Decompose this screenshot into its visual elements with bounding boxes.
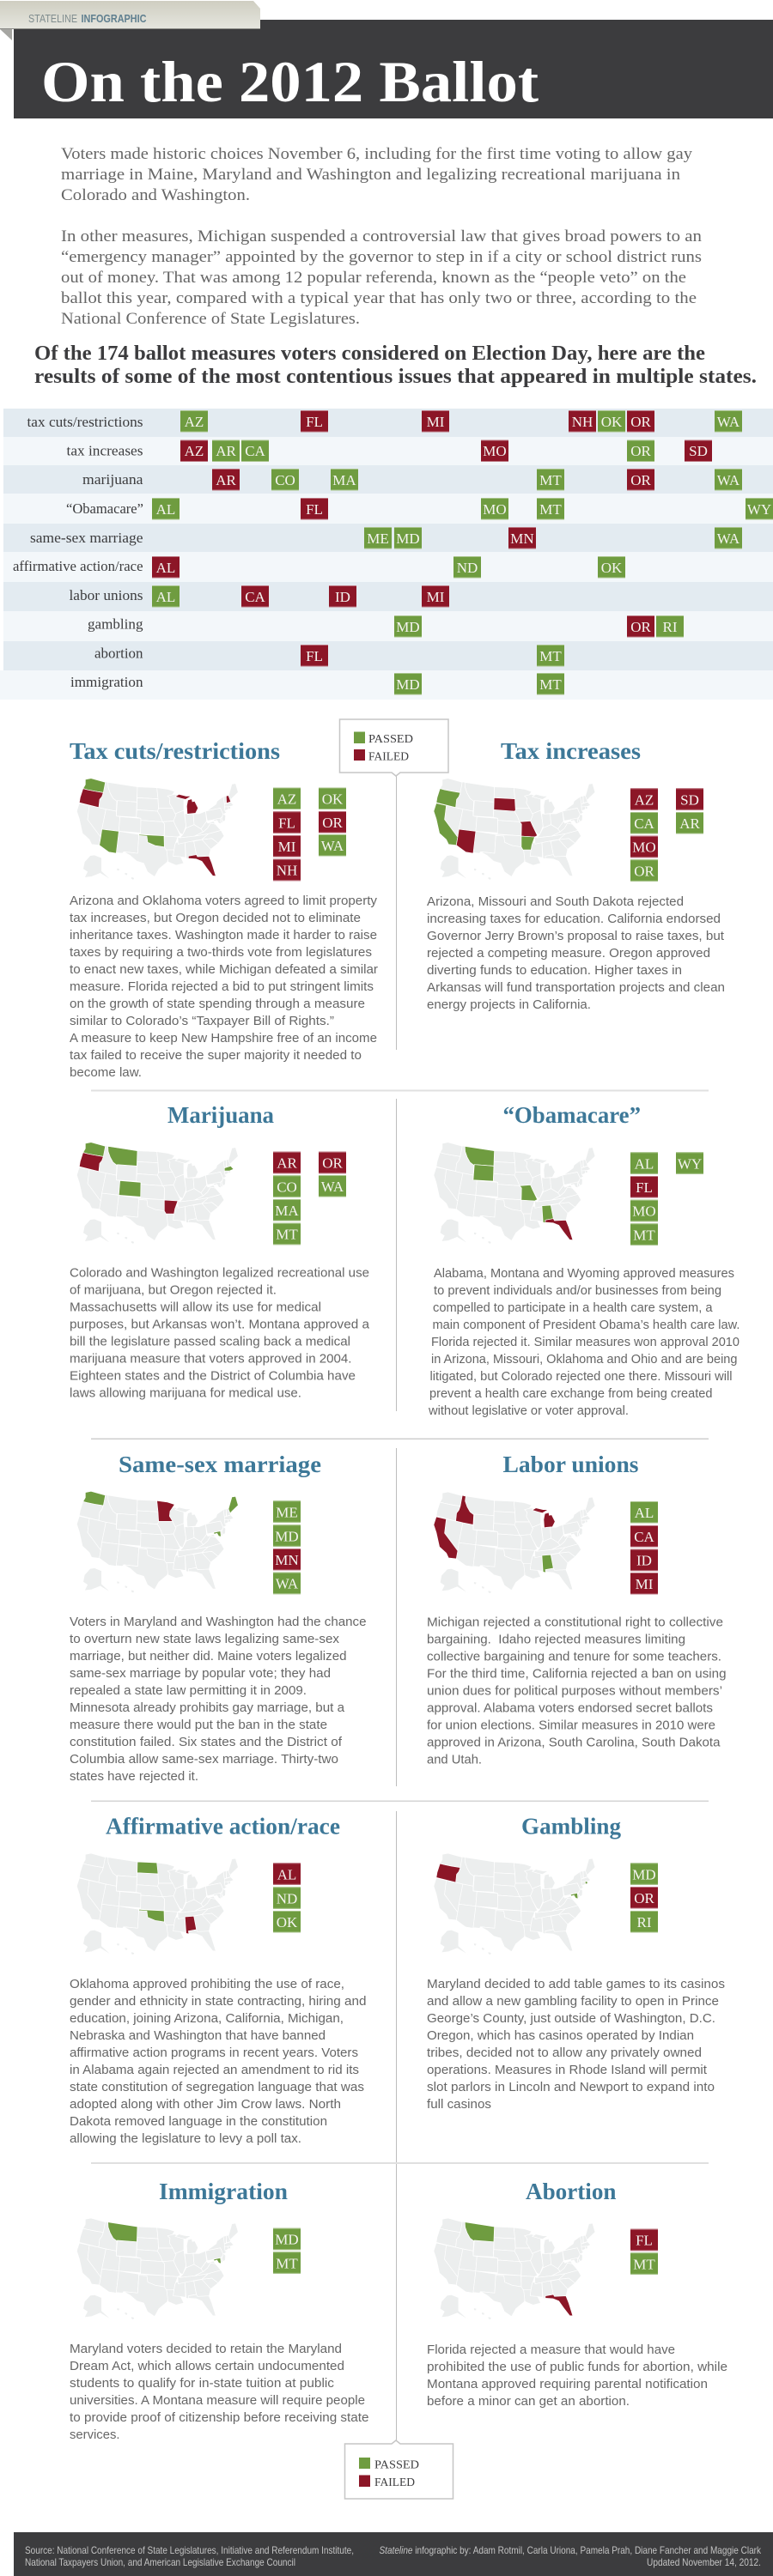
row: same-sex marriage: MN — [510, 530, 534, 547]
body text: same-sex marriage by popular vote; they had — [70, 1666, 331, 1681]
body text: universities. A Montana measure will require people — [70, 2393, 365, 2408]
body text: purposes, but Arkansas won’t. Montana approved a — [70, 1317, 370, 1331]
state chips: MN — [275, 1552, 299, 1568]
panel: same-sex marriage — [70, 1452, 366, 1784]
lead statement: results of some of the most contentious issues that appeared in multiple states. — [34, 366, 757, 388]
state chips — [273, 788, 346, 881]
state chips — [273, 1863, 301, 1933]
body text: A measure to keep New Hampshire free of an income — [70, 1031, 377, 1046]
state chips: WY — [678, 1155, 702, 1172]
body text: tax increases, but Oregon decided not to eliminate — [70, 911, 361, 925]
body text: to overturn new state laws legalizing same-sex — [70, 1632, 339, 1646]
body text: in Arizona, Missouri, Oklahoma and Ohio and are being — [431, 1352, 737, 1367]
body text: tax failed to receive the super majority it needed to — [70, 1048, 362, 1063]
body text: Oklahoma approved prohibiting the use of race, — [70, 1977, 344, 1991]
body text: laws allowing marijuana for medical use. — [70, 1385, 301, 1400]
intro text: “emergency manager” appointed by the governor to step in if a city or school district runs — [61, 248, 702, 266]
heading: “Obamacare” — [503, 1102, 641, 1128]
state chips: AL — [277, 1866, 296, 1882]
row: Obamacare: MT — [539, 501, 562, 518]
row: tax cuts/restrictions — [3, 409, 773, 437]
row: labor unions: CA — [245, 589, 266, 605]
body text: and Utah. — [427, 1753, 482, 1767]
state chips: AZ — [635, 791, 654, 808]
state chips: AL — [635, 1505, 654, 1521]
row: tax cuts/restrictions: OR — [630, 414, 651, 430]
body text: For the third time, California rejected a ban on using — [427, 1667, 727, 1682]
title banner — [14, 20, 773, 118]
body text — [70, 2342, 369, 2442]
body text: Maryland decided to add table games to its casinos — [427, 1977, 725, 1991]
body text: George’s County, just outside of Washington, D.C. — [427, 2011, 715, 2026]
state chips: MO — [632, 839, 656, 856]
state chips: ME — [276, 1504, 298, 1520]
body text: allowing the legislature to levy a poll tax. — [70, 2131, 301, 2146]
state chips: FL — [636, 2233, 653, 2249]
panel: affirmative action/race — [70, 1813, 366, 2146]
panel: gambling — [427, 1813, 725, 2112]
header tab — [0, 1, 260, 40]
body text: students to qualify for in-state tuition at public — [70, 2376, 335, 2391]
body text: taxes by requiring a two-thirds vote from legislatures — [70, 945, 372, 960]
header tab: INFOGRAPHIC — [81, 12, 147, 25]
body text: gender and ethnicity in state contracting, hiring and — [70, 1994, 366, 2009]
state chips: MT — [276, 2255, 298, 2271]
row: gambling: RI — [663, 619, 678, 635]
row: tax increases: AZ — [185, 443, 204, 459]
top legend — [340, 719, 448, 776]
panel: Obamacare — [428, 1102, 740, 1418]
body text: slot parlors in Lincoln and Newport to expand into — [427, 2080, 715, 2094]
row: Obamacare: AL — [156, 501, 175, 518]
body text: compelled to participate in a health care system, a — [433, 1300, 713, 1315]
body text: Colorado and Washington legalized recreational use — [70, 1265, 369, 1280]
body text: union dues for political purposes without members’ — [427, 1684, 722, 1699]
body text: operations. Measures in Rhode Island will permit — [427, 2063, 708, 2077]
row: tax cuts/restrictions: tax cuts/restrictions — [27, 414, 143, 430]
row: marijuana — [3, 465, 773, 494]
panel: immigration — [70, 2179, 369, 2442]
state chips: NH — [277, 863, 297, 879]
row: tax increases: OR — [630, 443, 651, 459]
body text — [70, 1977, 366, 2146]
body text: without legislative or voter approval. — [428, 1403, 629, 1418]
row: tax cuts/restrictions: MI — [427, 414, 445, 430]
state chips: RI — [637, 1914, 652, 1930]
row: tax cuts/restrictions: AZ — [185, 414, 204, 430]
row: tax cuts/restrictions: WA — [717, 414, 740, 430]
state chips — [630, 788, 703, 882]
state chips: CA — [634, 1529, 655, 1545]
heading: Immigration — [159, 2179, 288, 2204]
body text: bill the legislature passed scaling back a medical — [70, 1334, 350, 1349]
state chips: MA — [275, 1203, 299, 1219]
body text: energy projects in California. — [427, 997, 591, 1012]
row: abortion — [3, 641, 773, 670]
row: marijuana: marijuana — [82, 471, 143, 488]
row: abortion: abortion — [94, 646, 143, 661]
row: tax increases: SD — [689, 443, 708, 459]
intro text: ballot this year, compared with a typical year that has only two or three, according to the — [61, 289, 697, 307]
body text: collective bargaining and tenure for some teachers. — [427, 1650, 721, 1664]
heading: Gambling — [521, 1813, 621, 1839]
state chips — [630, 1152, 703, 1246]
row: tax cuts/restrictions: OK — [601, 414, 623, 430]
body text: state constitution of segregation language that was — [70, 2080, 364, 2094]
map — [76, 1491, 238, 1593]
intro text: out of money. That was among 12 popular referenda, known as the “people veto” on the — [61, 269, 686, 287]
body text: affirmative action programs in recent years. Voters — [70, 2046, 358, 2060]
body text: Governor Jerry Brown’s proposal to raise taxes, but — [427, 929, 725, 943]
row: abortion: MT — [539, 648, 562, 664]
row: marijuana: MA — [332, 472, 356, 488]
body text: on the growth of state spending through a measure — [70, 997, 365, 1011]
body text: Arizona, Missouri and South Dakota rejected — [427, 894, 684, 909]
lead statement — [34, 342, 757, 388]
body text — [70, 1265, 370, 1400]
body text: marijuana measure that voters approved in 2004. — [70, 1351, 351, 1366]
body text: main component of President Obama’s health care law. — [433, 1318, 740, 1332]
row: affirmative action/race — [3, 552, 773, 582]
body text: Montana approved requiring parental notification — [427, 2377, 708, 2391]
row: same-sex marriage — [3, 524, 773, 552]
map — [434, 2218, 595, 2320]
row: abortion: FL — [306, 648, 323, 664]
row: Obamacare: “Obamacare” — [66, 500, 143, 517]
state chips: SD — [680, 791, 699, 808]
body text: rejected a competing measure. Oregon approved — [427, 946, 710, 961]
map — [76, 1143, 238, 1244]
row: tax cuts/restrictions: NH — [572, 414, 593, 430]
row: Obamacare — [3, 494, 773, 524]
heading: Marijuana — [167, 1102, 274, 1128]
row: labor unions: AL — [156, 589, 175, 605]
heading: Abortion — [526, 2179, 617, 2204]
body text: marriage, but neither did. Maine voters legalized — [70, 1649, 347, 1664]
body text: prohibited the use of public funds for abortion, while — [427, 2360, 727, 2374]
bottom legend — [345, 2440, 453, 2499]
body text: litigated, but Colorado rejected one there. Missouri will — [429, 1369, 732, 1384]
body text: for union elections. Similar measures in 2010 were — [427, 1718, 715, 1733]
row: same-sex marriage: same-sex marriage — [30, 530, 143, 546]
row: tax increases: tax increases — [67, 443, 143, 458]
body text: before a minor can get an abortion. — [427, 2394, 630, 2409]
row: tax increases: MO — [483, 443, 507, 459]
row: same-sex marriage: MD — [396, 530, 420, 547]
intro text: In other measures, Michigan suspended a controversial law that gives broad powers to an — [61, 227, 703, 245]
body text: full casinos — [427, 2097, 491, 2112]
body text: Minnesota already prohibits gay marriage, but a — [70, 1700, 345, 1715]
footer — [14, 2532, 773, 2576]
body text: become law. — [70, 1065, 142, 1080]
body text — [70, 894, 378, 1080]
body text: measure there would put the ban in the state — [70, 1718, 327, 1732]
row: immigration: immigration — [70, 674, 143, 690]
body text: and allow a new gambling facility to open in Prince — [427, 1994, 719, 2009]
heading: Tax increases — [501, 738, 641, 764]
body text — [70, 1615, 366, 1784]
body text: tribes, decided not to allow any privately owned — [427, 2046, 702, 2060]
map — [434, 1143, 595, 1244]
body text: Voters in Maryland and Washington had the chance — [70, 1615, 366, 1629]
row: affirmative action/race: AL — [156, 560, 175, 576]
bottom legend: PASSED — [374, 2458, 419, 2472]
body text: repealed a state law permitting it in 2009. — [70, 1683, 307, 1698]
map — [76, 1853, 238, 1955]
top legend: PASSED — [368, 733, 413, 746]
state chips — [273, 1152, 346, 1245]
state chips: ND — [277, 1890, 297, 1906]
row: affirmative action/race: affirmative action/race — [13, 558, 143, 574]
map — [76, 779, 238, 880]
body text: Arizona and Oklahoma voters agreed to limit property — [70, 894, 377, 908]
row: gambling: OR — [630, 619, 651, 635]
body text: to enact new taxes, while Michigan defeated a similar — [70, 962, 378, 977]
row: marijuana: WA — [717, 472, 740, 488]
body text: diverting funds to education. Higher taxes in — [427, 963, 682, 978]
footer: Source: National Conference of State Legislatures, Initiative and Referendum Institute, — [25, 2544, 354, 2556]
body text: adopted along with other Jim Crow laws. North — [70, 2097, 341, 2112]
row: affirmative action/race: OK — [601, 560, 623, 576]
row: labor unions — [3, 582, 773, 611]
row: labor unions: ID — [335, 589, 350, 605]
body text: Arkansas will fund transportation projects and clean — [427, 980, 725, 995]
row: Obamacare: FL — [306, 501, 323, 518]
state chips: AZ — [277, 791, 296, 807]
state chips: CO — [277, 1179, 297, 1195]
state chips — [630, 1501, 658, 1595]
row: gambling — [3, 611, 773, 641]
body text — [427, 1977, 725, 2112]
body text: Dream Act, which allows certain undocumented — [70, 2359, 344, 2373]
state chips — [273, 2228, 301, 2274]
heading: Same-sex marriage — [119, 1452, 321, 1477]
panel: tax increases — [427, 738, 725, 1012]
row: tax cuts/restrictions: FL — [306, 414, 323, 430]
body text: measure. Florida rejected a bid to put stringent limits — [70, 979, 374, 994]
center divider lines — [396, 774, 397, 2440]
state chips: OR — [322, 815, 343, 831]
body text: Florida rejected a measure that would have — [427, 2343, 675, 2357]
row: marijuana: CO — [275, 472, 295, 488]
state chips: AL — [635, 1155, 654, 1172]
map — [434, 1492, 595, 1594]
panel: labor unions — [427, 1452, 727, 1767]
state chips: MD — [275, 2232, 299, 2248]
state chips: WA — [321, 838, 344, 854]
state chips: MI — [636, 1576, 654, 1592]
body text: bargaining. Idaho rejected measures limiting — [427, 1633, 685, 1647]
body text: to provide proof of citizenship before receiving state — [70, 2410, 369, 2425]
body text: services. — [70, 2428, 120, 2442]
row: immigration: MD — [396, 676, 420, 693]
body text: constitution failed. Six states and the District of — [70, 1735, 343, 1749]
lead statement: Of the 174 ballot measures voters considered on Election Day, here are the — [34, 342, 705, 365]
summary table — [0, 409, 773, 700]
state chips: MO — [632, 1203, 656, 1220]
state chips: OR — [634, 863, 654, 879]
body text: Dakota removed language in the constitution — [70, 2114, 327, 2129]
state chips: MT — [276, 1227, 298, 1243]
row: tax increases: CA — [245, 443, 266, 459]
intro text: marriage in Maine, Maryland and Washington and legalizing recreational marijuana in — [61, 166, 681, 184]
body text — [428, 1266, 740, 1418]
title banner: On the 2012 Ballot — [41, 49, 539, 114]
state chips: MT — [633, 1227, 655, 1243]
header tab: STATELINE — [28, 12, 77, 25]
body text — [427, 894, 725, 1012]
state chips: FL — [636, 1179, 653, 1196]
state chips: CA — [634, 815, 655, 832]
row: labor unions: labor unions — [69, 587, 143, 603]
row: affirmative action/race: ND — [457, 560, 478, 576]
row: gambling: MD — [396, 619, 420, 635]
row: marijuana: OR — [630, 472, 651, 488]
state chips: MD — [275, 1528, 299, 1544]
row: Obamacare: WY — [747, 501, 771, 518]
body text: approval. Alabama voters endorsed secret ballots — [427, 1701, 713, 1716]
heading: Labor unions — [503, 1452, 639, 1477]
row: marijuana: MT — [539, 472, 562, 488]
state chips: WA — [276, 1576, 299, 1592]
state chips — [273, 1500, 301, 1594]
body text — [427, 1615, 727, 1767]
state chips: ID — [636, 1553, 652, 1569]
row: immigration — [0, 670, 773, 700]
footer: National Taxpayers Union, and American Legislative Exchange Council — [25, 2556, 295, 2568]
body text: Eighteen states and the District of Columbia have — [70, 1368, 356, 1383]
body text: Michigan rejected a constitutional right to collective — [427, 1615, 723, 1630]
intro text: Colorado and Washington. — [61, 186, 250, 204]
state chips: MD — [632, 1866, 656, 1882]
row: same-sex marriage: ME — [367, 530, 389, 547]
intro text — [61, 145, 703, 328]
state chips: OK — [277, 1914, 298, 1930]
body text: Oregon, which has casinos operated by Indian — [427, 2028, 694, 2043]
map — [434, 779, 595, 880]
state chips: MT — [633, 2256, 655, 2272]
intro text: Voters made historic choices November 6, including for the first time voting to allow gay — [61, 145, 693, 163]
panel: marijuana — [70, 1102, 370, 1400]
map — [76, 2218, 238, 2320]
heading: Affirmative action/race — [106, 1813, 340, 1839]
body text: increasing taxes for education. California endorsed — [427, 912, 721, 926]
state chips: OR — [322, 1155, 343, 1172]
row: Obamacare: MO — [483, 501, 507, 518]
body text: states have rejected it. — [70, 1769, 198, 1784]
body text: of marijuana, but Oregon rejected it. — [70, 1282, 277, 1297]
state chips: OK — [322, 791, 344, 807]
body text: to prevent individuals and/or businesses from being — [434, 1283, 721, 1298]
body text: Columbia allow same-sex marriage. Thirty-two — [70, 1752, 338, 1767]
body text: Alabama, Montana and Wyoming approved measures — [434, 1266, 734, 1281]
state chips: AR — [277, 1155, 297, 1172]
intro text: National Conference of State Legislatures. — [61, 310, 360, 328]
row: tax increases: AR — [216, 443, 236, 459]
row: marijuana: AR — [216, 472, 236, 488]
body text: Massachusetts will allow its use for medical — [70, 1300, 321, 1314]
map — [434, 1853, 595, 1955]
panel: tax cuts/restrictions — [70, 738, 378, 1080]
row: tax increases — [3, 437, 773, 465]
state chips: MI — [278, 839, 296, 855]
bottom legend: FAILED — [374, 2476, 415, 2489]
body text: in Alabama again rejected an amendment to rid its — [70, 2063, 359, 2077]
state chips — [630, 1863, 658, 1933]
heading: Tax cuts/restrictions — [70, 738, 280, 764]
body text: Nebraska and Washington that have banned — [70, 2028, 326, 2043]
body text: Maryland voters decided to retain the Maryland — [70, 2342, 342, 2356]
state chips: FL — [278, 815, 295, 831]
state chips: WA — [321, 1179, 344, 1195]
body text: inheritance taxes. Washington made it harder to raise — [70, 928, 377, 943]
state chips: AR — [679, 815, 700, 832]
row: same-sex marriage: WA — [717, 530, 740, 547]
top legend: FAILED — [368, 750, 409, 764]
row: labor unions: MI — [427, 589, 445, 605]
state chips — [630, 2229, 658, 2275]
body text: prevent a health care exchange from being created — [429, 1386, 713, 1401]
panel: abortion — [427, 2179, 727, 2409]
body text: approved in Arizona, South Carolina, South Dakota — [427, 1736, 721, 1750]
body text: Florida rejected it. Similar measures won approval 2010 — [431, 1335, 740, 1349]
row: gambling: gambling — [88, 616, 143, 632]
body text — [427, 2343, 727, 2409]
body text: education, joining Arizona, California, Michigan, — [70, 2011, 344, 2026]
state chips: OR — [634, 1890, 654, 1906]
row: immigration: MT — [539, 676, 562, 693]
body text: similar to Colorado’s “Taxpayer Bill of Rights.” — [70, 1014, 334, 1028]
